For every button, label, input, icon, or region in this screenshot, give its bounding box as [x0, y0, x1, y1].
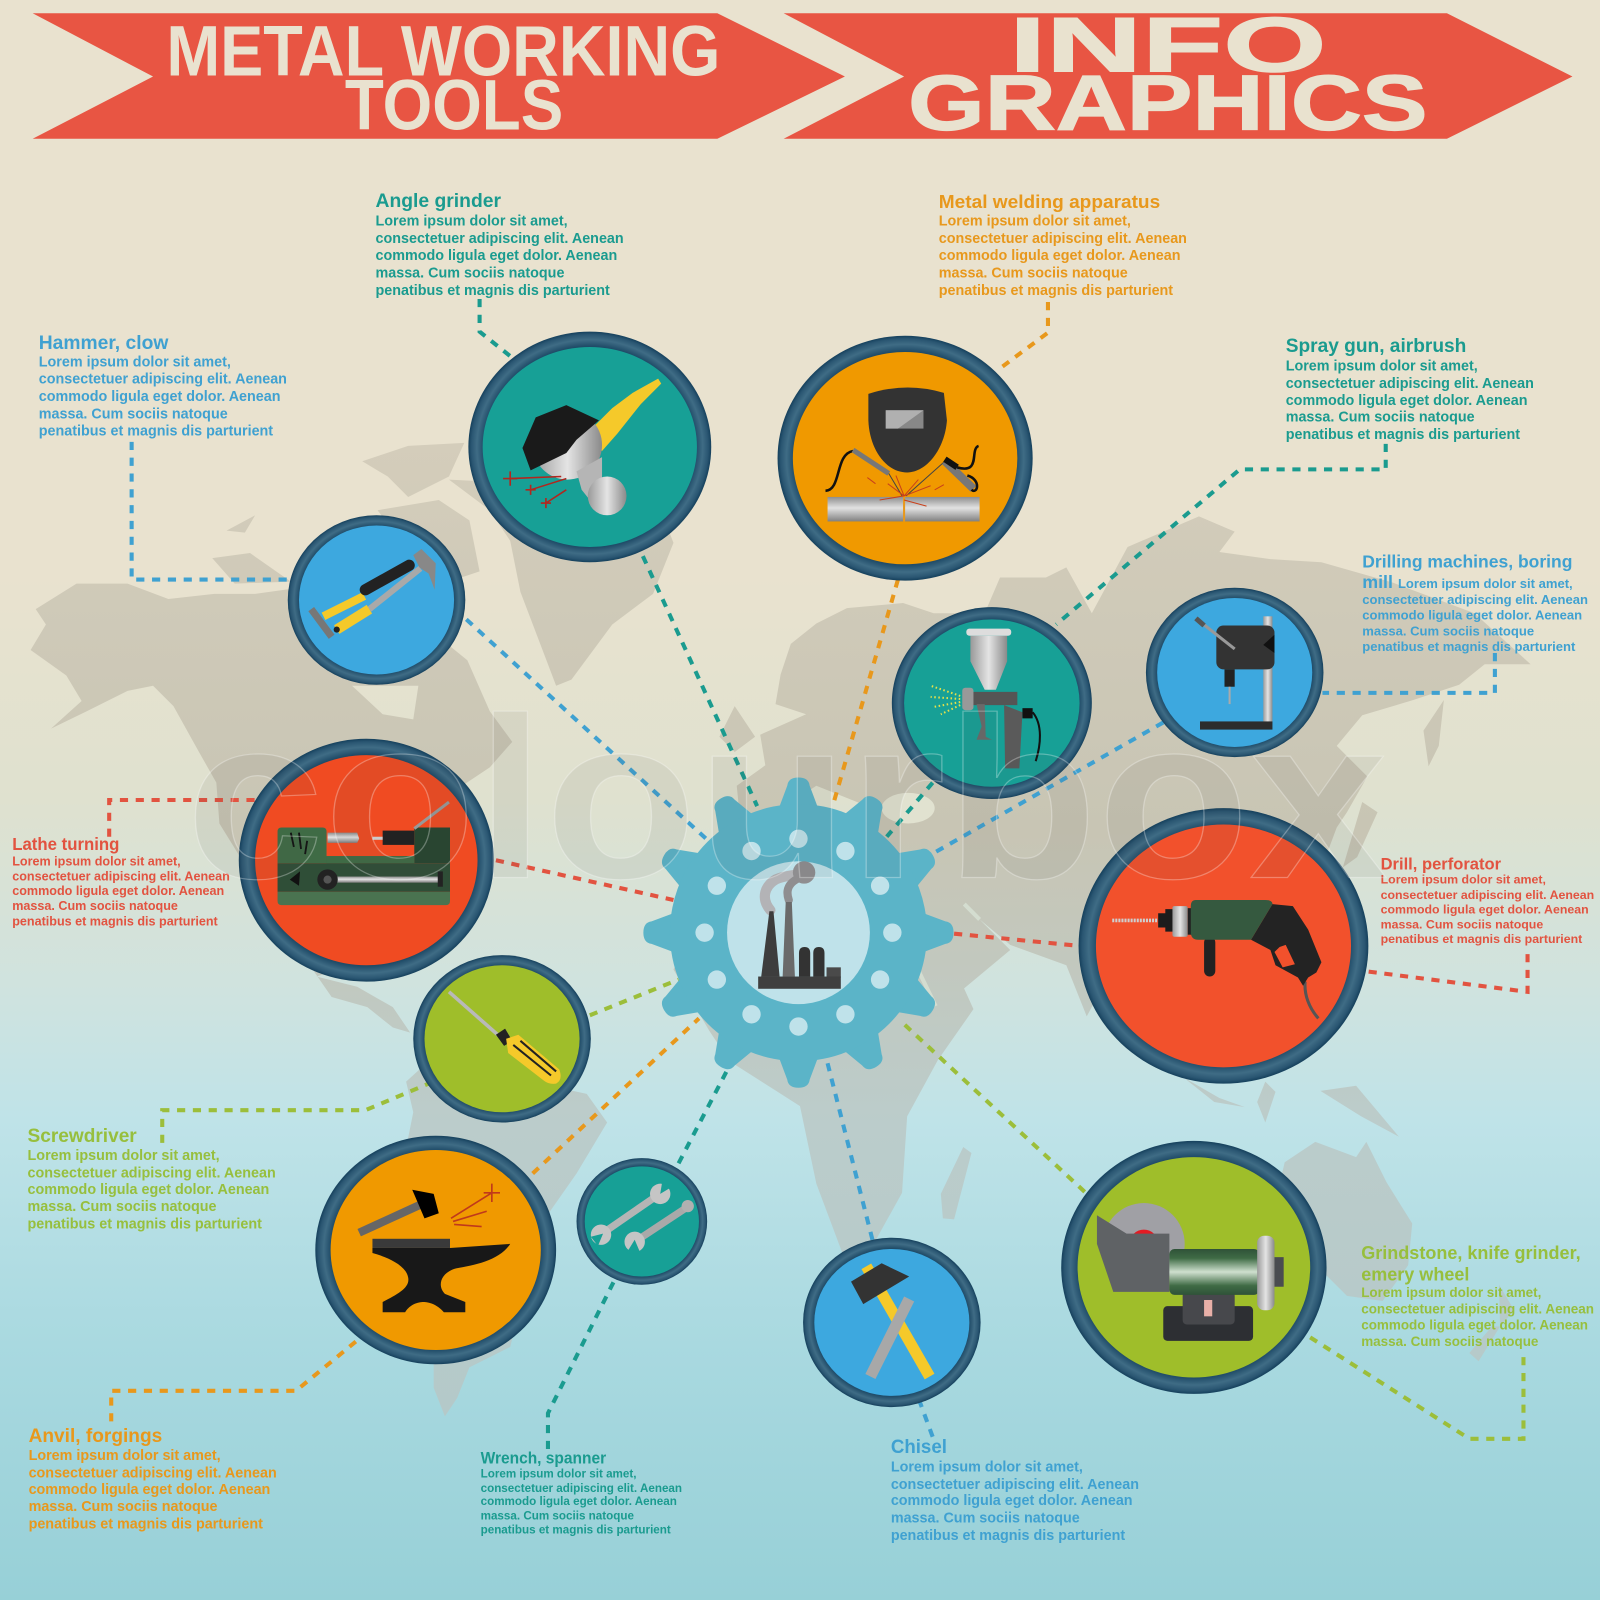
text: metal welding apparatus: commodo ligula eget dolor. Aenean: [939, 248, 1181, 264]
panel: drill press icon circle: [1146, 588, 1323, 757]
text: metal welding apparatus: penatibus et magnis dis parturient: [939, 283, 1173, 299]
title: metal working tools: METAL WORKING: [166, 12, 720, 92]
text: drill, perforator: Lorem ipsum dolor sit amet,: [1381, 873, 1546, 887]
text: metal welding apparatus: consectetuer adipiscing elit. Aenean: [939, 231, 1187, 247]
text: wrench, spanner: Lorem ipsum dolor sit amet,: [481, 1468, 637, 1481]
text: drilling machines, boring mill: penatibus et magnis dis parturient: [1362, 639, 1576, 654]
panel: grindstone icon circle: [1061, 1141, 1327, 1394]
text: wrench, spanner: Wrench, spanner: [481, 1449, 607, 1467]
icon: factory: [758, 861, 841, 989]
text: hammer, clow: consectetuer adipiscing elit. Aenean: [39, 372, 287, 388]
panel: spray gun icon circle: [892, 607, 1092, 799]
connector: hammer: [132, 442, 706, 839]
text: wrench, spanner: [481, 1449, 682, 1537]
panel: hammer icon circle: [288, 515, 465, 685]
text: chisel: consectetuer adipiscing elit. Aenean: [891, 1477, 1139, 1493]
panel: wrench icon circle: [577, 1158, 707, 1285]
text: anvil, forgings: massa. Cum sociis natoque: [29, 1499, 218, 1515]
text: drilling machines, boring mill: commodo ligula eget dolor. Aenean: [1362, 607, 1582, 622]
text: anvil, forgings: penatibus et magnis dis parturient: [29, 1517, 263, 1533]
title: info graphics: [908, 2, 1428, 147]
panel: angle grinder icon circle: [468, 332, 711, 562]
text: hammer, clow: commodo ligula eget dolor. Aenean: [39, 389, 281, 405]
text: lathe turning: penatibus et magnis dis parturient: [12, 915, 219, 929]
text: drill, perforator: [1381, 854, 1594, 946]
text: lathe turning: consectetuer adipiscing elit. Aenean: [12, 870, 230, 884]
text: lathe turning: massa. Cum sociis natoque: [12, 899, 178, 913]
icon: spray gun: [931, 629, 1040, 768]
text: hammer, clow: [39, 332, 287, 440]
banner: metal working tools: [33, 13, 845, 139]
connector: grinder: [900, 1020, 1523, 1439]
text: screwdriver: [28, 1125, 276, 1233]
text: grindstone, knife grinder, emery wheel: commodo ligula eget dolor. Aenean: [1361, 1318, 1588, 1333]
text: screwdriver: penatibus et magnis dis parturient: [28, 1217, 262, 1233]
text: wrench, spanner: consectetuer adipiscing elit. Aenean: [481, 1482, 682, 1495]
text: anvil, forgings: [29, 1425, 277, 1533]
text: angle grinder: massa. Cum sociis natoque: [376, 266, 564, 282]
text: spray gun, airbrush: massa. Cum sociis natoque: [1286, 409, 1475, 425]
text: screwdriver: consectetuer adipiscing elit. Aenean: [28, 1166, 276, 1182]
icon: welding helmet and pipes: [826, 387, 980, 521]
text: metal welding apparatus: massa. Cum sociis natoque: [939, 266, 1128, 282]
connector: angle grinder: [480, 299, 757, 806]
text: metal welding apparatus: [939, 191, 1187, 299]
connector: welding: [833, 302, 1048, 806]
text: grindstone, knife grinder, emery wheel: consectetuer adipiscing elit. Aenean: [1361, 1301, 1594, 1316]
text: metal welding apparatus: Metal welding apparatus: [939, 191, 1160, 212]
icon: drill press: [1196, 616, 1274, 730]
connector: drilling machine: [934, 653, 1495, 853]
text: grindstone, knife grinder, emery wheel: massa. Cum sociis natoque: [1361, 1334, 1539, 1349]
connector: spray gun: [887, 444, 1386, 837]
text: drilling machines, boring mill: [1362, 551, 1588, 654]
text: wrench, spanner: penatibus et magnis dis parturient: [481, 1524, 671, 1537]
text: drilling machines, boring mill: mill: [1362, 572, 1393, 592]
text: anvil, forgings: commodo ligula eget dolor. Aenean: [29, 1482, 270, 1498]
text: drilling machines, boring mill: Drilling machines, boring: [1362, 551, 1572, 571]
icon: anvil with hammer: [359, 1184, 510, 1312]
title: info graphics: GRAPHICS: [908, 61, 1428, 147]
banner: info graphics: [784, 13, 1572, 139]
text: screwdriver: Lorem ipsum dolor sit amet,: [28, 1148, 220, 1164]
text: hammer, clow: massa. Cum sociis natoque: [39, 406, 228, 422]
icon: bench grinder: [1097, 1203, 1284, 1341]
text: spray gun, airbrush: commodo ligula eget dolor. Aenean: [1286, 393, 1527, 409]
icon: angle grinder: [503, 379, 661, 515]
connector: chisel: [827, 1059, 933, 1437]
text: angle grinder: consectetuer adipiscing elit. Aenean: [376, 231, 624, 247]
text: anvil, forgings: consectetuer adipiscing elit. Aenean: [29, 1466, 277, 1482]
panel: welding icon circle: [778, 336, 1033, 581]
text: grindstone, knife grinder, emery wheel: [1361, 1242, 1594, 1349]
panel: chisel icon circle: [803, 1238, 981, 1407]
icon: wrenches: [591, 1182, 694, 1254]
text: metal welding apparatus: Lorem ipsum dolor sit amet,: [939, 214, 1131, 230]
title: metal working tools: TOOLS: [345, 66, 563, 146]
text: wrench, spanner: massa. Cum sociis natoque: [481, 1509, 634, 1522]
text: screwdriver: Screwdriver: [28, 1125, 137, 1147]
text: chisel: commodo ligula eget dolor. Aenean: [891, 1493, 1133, 1509]
text: angle grinder: Lorem ipsum dolor sit amet,: [376, 214, 568, 230]
text: anvil, forgings: Lorem ipsum dolor sit amet,: [29, 1448, 221, 1464]
text: lathe turning: commodo ligula eget dolor. Aenean: [12, 884, 224, 898]
icon: screwdriver: [449, 992, 561, 1084]
watermark: colourbox: [186, 670, 1388, 927]
text: angle grinder: [376, 190, 624, 299]
text: spray gun, airbrush: [1286, 335, 1534, 443]
text: screwdriver: commodo ligula eget dolor. Aenean: [28, 1182, 269, 1198]
text: chisel: Lorem ipsum dolor sit amet,: [891, 1459, 1083, 1475]
text: drill, perforator: penatibus et magnis dis parturient: [1381, 932, 1582, 946]
text: grindstone, knife grinder, emery wheel: Lorem ipsum dolor sit amet,: [1361, 1285, 1541, 1300]
panel: screwdriver icon circle: [413, 955, 591, 1122]
text: angle grinder: Angle grinder: [376, 190, 501, 212]
text: lathe turning: Lathe turning: [12, 834, 119, 854]
connector: drill: [954, 934, 1528, 992]
text: hammer, clow: penatibus et magnis dis parturient: [39, 424, 273, 440]
icon: hammer and chisel: [851, 1263, 930, 1377]
text: chisel: Chisel: [891, 1436, 947, 1458]
text: drill, perforator: commodo ligula eget dolor. Aenean: [1381, 902, 1589, 916]
text: spray gun, airbrush: penatibus et magnis dis parturient: [1286, 427, 1520, 443]
icon: claw hammer: [311, 549, 436, 637]
text: chisel: [891, 1436, 1139, 1544]
text: chisel: penatibus et magnis dis parturient: [891, 1528, 1125, 1544]
connector: lathe: [109, 800, 673, 900]
text: angle grinder: commodo ligula eget dolor. Aenean: [376, 248, 617, 264]
text: wrench, spanner: commodo ligula eget dolor. Aenean: [481, 1495, 677, 1508]
icon: lathe: [278, 802, 450, 905]
panel: drill icon circle: [1079, 808, 1368, 1084]
text: drilling machines, boring mill: massa. Cum sociis natoque: [1362, 624, 1534, 639]
icon: electric drill: [1112, 900, 1321, 1018]
text: spray gun, airbrush: consectetuer adipiscing elit. Aenean: [1286, 376, 1534, 392]
panel: anvil icon circle: [315, 1136, 556, 1364]
text: hammer, clow: Hammer, clow: [39, 332, 169, 354]
text: screwdriver: massa. Cum sociis natoque: [28, 1199, 216, 1215]
text: angle grinder: penatibus et magnis dis parturient: [376, 283, 610, 299]
text: spray gun, airbrush: Spray gun, airbrush: [1286, 335, 1466, 357]
connector: screwdriver: [162, 980, 679, 1143]
text: lathe turning: Lorem ipsum dolor sit amet,: [12, 854, 181, 868]
title: info graphics: INFO: [1009, 2, 1327, 88]
text: grindstone, knife grinder, emery wheel: Grindstone, knife grinder,: [1361, 1242, 1581, 1263]
panel: lathe icon circle: [239, 739, 494, 982]
connector: anvil: [111, 1018, 699, 1421]
text: lathe turning: [12, 834, 230, 929]
text: drill, perforator: consectetuer adipiscing elit. Aenean: [1381, 888, 1594, 902]
text: drill, perforator: Drill, perforator: [1381, 854, 1501, 873]
text: drill, perforator: massa. Cum sociis natoque: [1381, 918, 1543, 932]
title: metal working tools: [166, 12, 720, 146]
text: drilling machines, boring mill: consectetuer adipiscing elit. Aenean: [1362, 592, 1588, 607]
text: drilling machines, boring mill: Lorem ipsum dolor sit amet,: [1398, 576, 1573, 591]
text: spray gun, airbrush: Lorem ipsum dolor sit amet,: [1286, 358, 1478, 374]
text: chisel: massa. Cum sociis natoque: [891, 1510, 1080, 1526]
connector: wrench: [548, 1071, 727, 1449]
text: hammer, clow: Lorem ipsum dolor sit amet,: [39, 354, 231, 370]
text: grindstone, knife grinder, emery wheel: emery wheel: [1361, 1264, 1469, 1285]
gear: central cog: [643, 778, 954, 1088]
world map: [31, 443, 1531, 1416]
text: anvil, forgings: Anvil, forgings: [29, 1425, 162, 1447]
